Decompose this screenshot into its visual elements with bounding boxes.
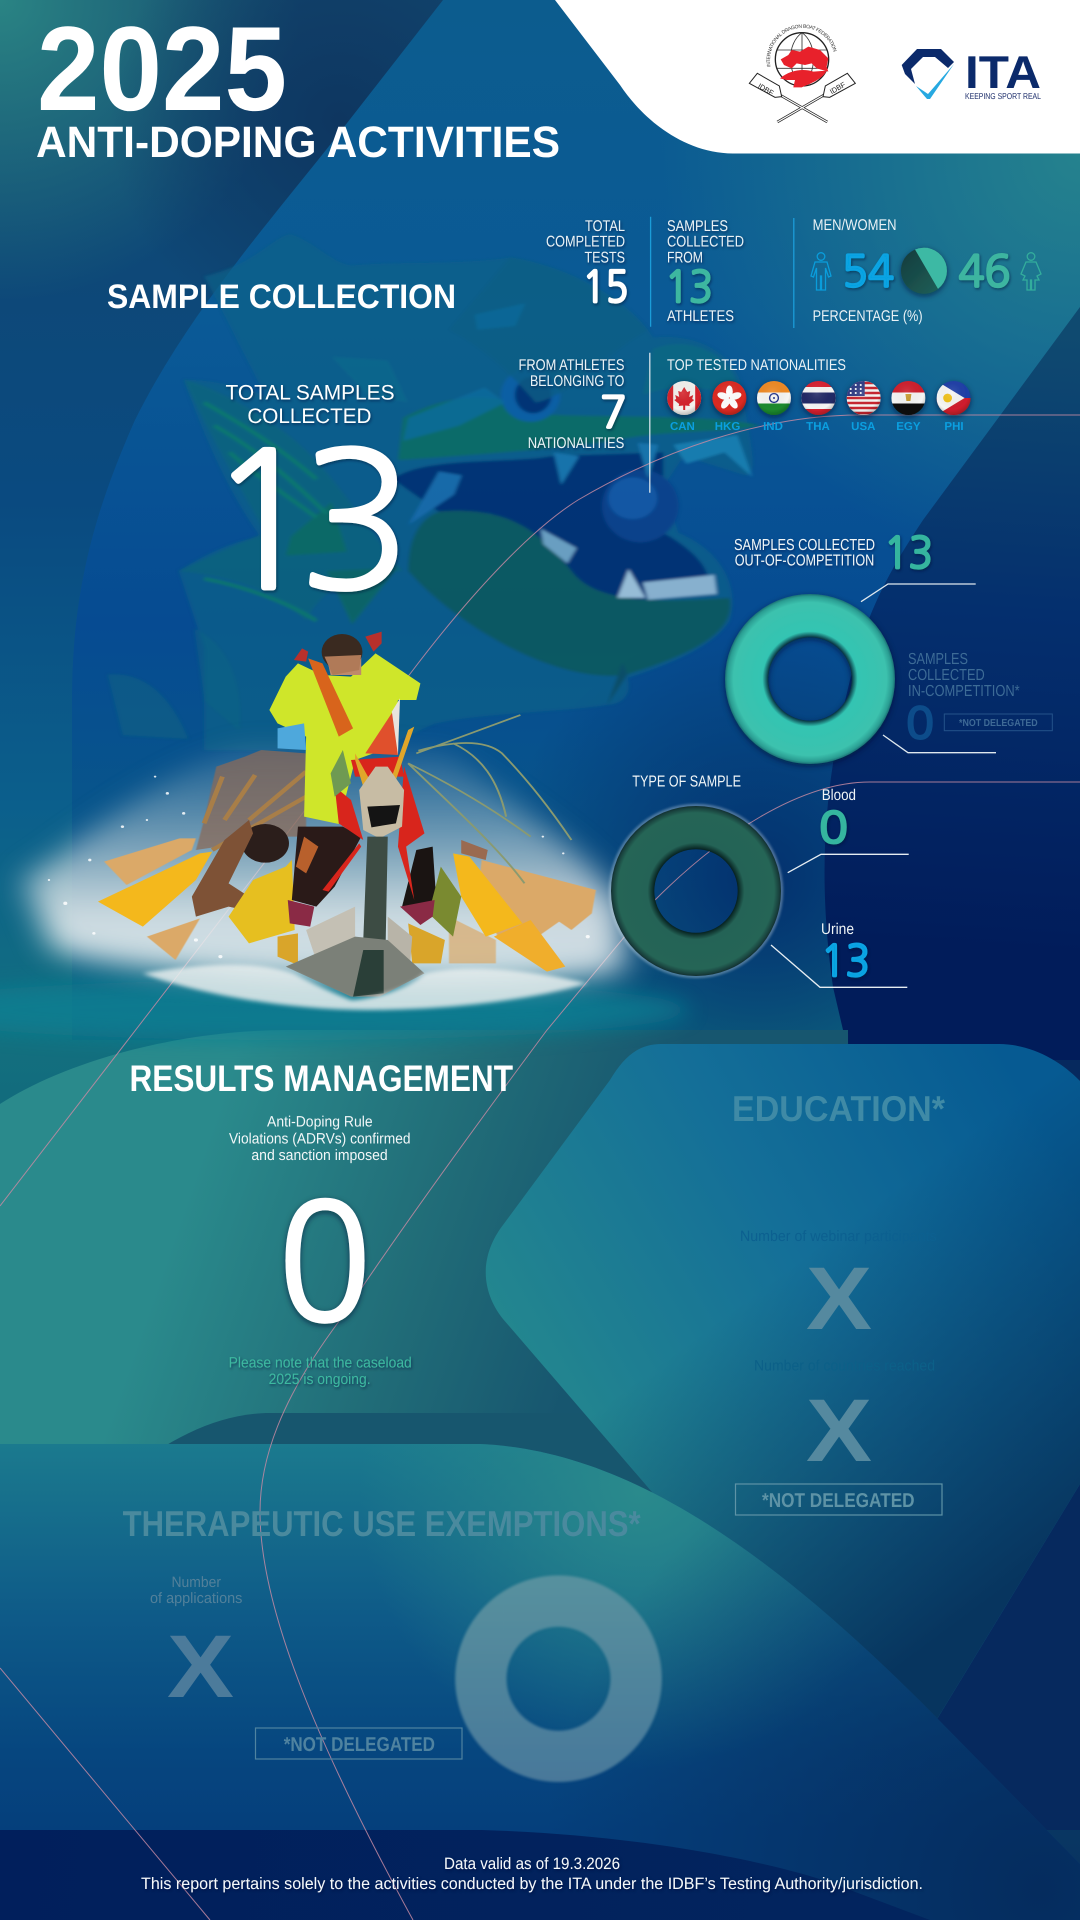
flag: USA [847, 381, 881, 415]
logo: IDBF: INTERNATIONAL DRAGON BOAT FEDERATION [766, 24, 837, 67]
photo: dragon boat crew in spray [24, 632, 624, 1010]
label: samples in-competition not delegated: SAMPLES [908, 651, 968, 668]
label: samples out-of-competition: SAMPLES COLLECTED [734, 537, 875, 554]
top tested nationalities: TOP TESTED NATIONALITIES [667, 357, 846, 374]
pink accent lines [0, 415, 1080, 1920]
section: education [732, 1088, 945, 1515]
icon: man [811, 253, 831, 290]
stat: samples collected from athletes: 13 [665, 266, 713, 309]
logo: IDBF: IDBF [756, 82, 775, 97]
steerer head [327, 657, 361, 675]
flag labels [670, 421, 964, 433]
footer note: Data valid as of 19.3.2026 [444, 1855, 620, 1873]
stat: nationalities [518, 357, 627, 452]
stat: men/women percentage: PERCENTAGE (%) [813, 308, 923, 325]
rear rowers [196, 750, 306, 850]
flag: Philippines [937, 381, 971, 415]
section: education: *NOT DELEGATED [762, 1490, 915, 1512]
logo: ITA: KEEPING SPORT REAL [965, 91, 1041, 101]
footer note: This report pertains solely to the activities conducted by the ITA under the IDBF’s Testing Authority/jurisdiction. [141, 1875, 923, 1893]
red drapes and bow [322, 757, 424, 900]
section: results management: 0 [279, 1161, 371, 1360]
donut chart: competition split [725, 594, 895, 764]
flag: Thailand [802, 381, 836, 415]
flag labels: IND [763, 421, 783, 433]
label: samples in-competition not delegated [906, 651, 1052, 746]
leader lines: competition [861, 584, 996, 753]
caseload note: Please note that the caseload [229, 1355, 412, 1372]
flag labels: CAN [670, 421, 695, 433]
label: blood [788, 787, 909, 873]
section: therapeutic use exemptions: *NOT DELEGATED [284, 1734, 435, 1756]
section: education: X [806, 1380, 872, 1480]
stat: total completed tests: TOTAL [585, 218, 625, 235]
stat: men/women percentage: 46 [958, 250, 1010, 294]
section: results management: RESULTS MANAGEMENT [130, 1058, 513, 1099]
title: ANTI-DOPING ACTIVITIES [36, 118, 560, 167]
logo: IDBF: IDBF [828, 80, 847, 96]
total samples collected: TOTAL SAMPLES [226, 382, 394, 404]
steerer shirt [269, 653, 420, 824]
bow wave [143, 965, 588, 1010]
yellow paddles [98, 852, 565, 972]
stat: samples collected from athletes: ATHLETES [667, 308, 734, 325]
stat: samples collected from athletes [665, 218, 744, 325]
title: 2025 [37, 2, 287, 136]
pie chart: men vs women [901, 248, 947, 294]
label: urine: 13 [821, 940, 870, 983]
stat: total completed tests: COMPLETED [546, 234, 625, 250]
section: therapeutic use exemptions: of applications [150, 1590, 242, 1607]
label: blood: 0 [819, 807, 848, 850]
stat: nationalities: BELONGING TO [530, 373, 624, 390]
flag labels: USA [851, 421, 875, 433]
section: therapeutic use exemptions: Number [172, 1574, 221, 1591]
stat: men/women percentage [811, 217, 1041, 325]
icon: woman [1021, 253, 1041, 290]
label: samples in-competition not delegated: IN-COMPETITION* [908, 683, 1020, 700]
section: education: EDUCATION* [732, 1088, 945, 1129]
label: samples out-of-competition [734, 532, 933, 575]
flag labels: PHI [944, 421, 964, 433]
section: education: X [806, 1248, 872, 1348]
blue cap [278, 723, 306, 750]
total samples collected: COLLECTED [247, 405, 371, 428]
total samples collected: 13 [205, 427, 413, 617]
label: samples in-competition not delegated: COLLECTED [908, 667, 985, 684]
heading: sample collection: SAMPLE COLLECTION [107, 278, 456, 316]
foreground rower [242, 824, 289, 863]
section: therapeutic use exemptions: X [167, 1616, 234, 1716]
stat: total completed tests [546, 218, 628, 309]
stat: nationalities: FROM ATHLETES [518, 357, 624, 374]
prow neck [363, 837, 388, 940]
label: samples in-competition not delegated: 0 [906, 702, 934, 746]
flag: Hong Kong [712, 381, 746, 415]
ADRV description: and sanction imposed [251, 1147, 388, 1164]
boat hull [278, 923, 445, 965]
stat: men/women percentage: MEN/WOMEN [813, 217, 897, 234]
label: blood: Blood [822, 787, 856, 804]
flag labels: EGY [896, 421, 921, 433]
footer note [141, 1855, 923, 1893]
label: samples out-of-competition: 13 [884, 532, 933, 575]
label: urine: Urine [821, 921, 854, 938]
flag labels: THA [806, 421, 830, 433]
white header corner [555, 0, 1080, 154]
stat: nationalities: 7 [600, 392, 627, 434]
stat: samples collected from athletes: COLLECTED [667, 234, 744, 250]
section: education: Number of countries reached [754, 1358, 935, 1374]
ADRV description [229, 1114, 410, 1164]
flag: Canada [667, 381, 701, 415]
stat: total completed tests: TESTS [584, 250, 625, 266]
stat: total completed tests: 15 [582, 266, 628, 309]
flag: India [757, 381, 791, 416]
flag: Egypt [891, 381, 925, 416]
stat divider lines [650, 217, 794, 493]
section: therapeutic use exemptions [123, 1503, 662, 1782]
water spray glow [24, 747, 624, 983]
title [36, 2, 560, 167]
right rower [402, 847, 437, 923]
stat: samples collected from athletes: SAMPLES [667, 218, 728, 235]
faded back paddles [104, 838, 596, 963]
label: urine [771, 921, 907, 987]
section: therapeutic use exemptions: THERAPEUTIC USE EXEMPTIONS* [123, 1503, 641, 1544]
grass [408, 715, 571, 883]
logo: IDBF [748, 24, 856, 124]
caseload note [229, 1355, 412, 1388]
label: type of sample: TYPE OF SAMPLE [632, 774, 741, 791]
donut chart: type of sample [610, 806, 782, 976]
flag [365, 710, 398, 755]
top tested nationalities [667, 357, 971, 433]
dragon head background [107, 234, 760, 750]
caseload note: 2025 is ongoing. [269, 1371, 371, 1388]
stat: nationalities: NATIONALITIES [528, 435, 624, 452]
ADRV description: Violations (ADRVs) confirmed [229, 1130, 410, 1148]
logo: ITA [902, 46, 1041, 101]
section: results management [130, 1058, 513, 1388]
donut chart: TUE [455, 1575, 662, 1782]
section: education: Number of webinar participants [740, 1228, 937, 1245]
stat: men/women percentage: 54 [842, 250, 894, 294]
ADRV description: Anti-Doping Rule [267, 1114, 373, 1130]
label: samples out-of-competition: OUT-OF-COMPETITION [735, 553, 874, 570]
steerer shorts [292, 827, 361, 907]
flag labels: HKG [715, 421, 740, 433]
dragon prow head [359, 767, 404, 838]
label: samples in-competition not delegated: *NOT DELEGATED [959, 718, 1038, 729]
stat: samples collected from athletes: FROM [667, 250, 703, 266]
sash [308, 658, 353, 737]
spray droplets [48, 776, 590, 958]
logo: ITA: ITA [965, 46, 1041, 98]
